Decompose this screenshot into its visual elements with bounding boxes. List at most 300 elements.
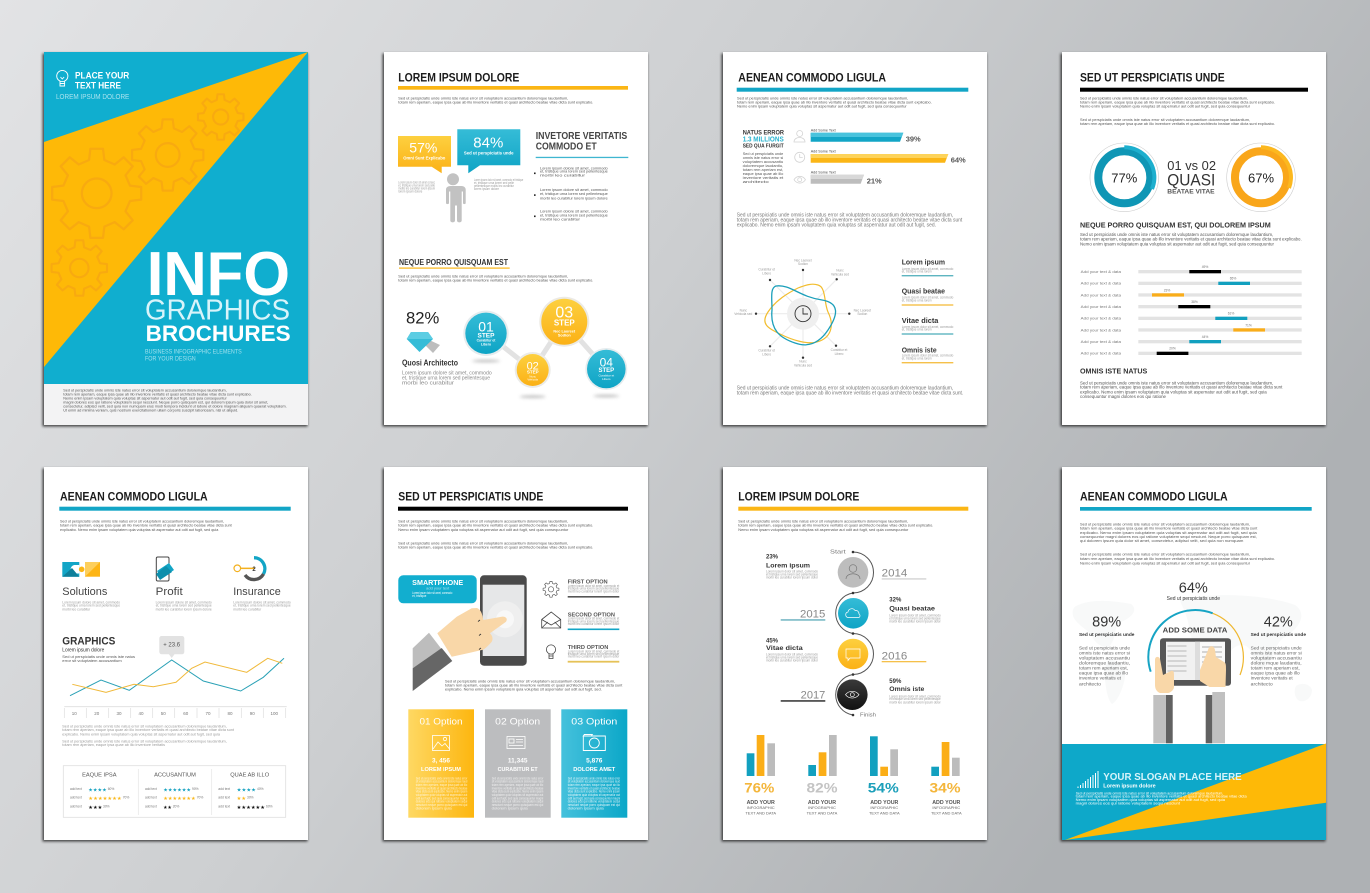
stat block: natus error xyxy=(743,130,784,184)
bar chart: 54%: ADD YOUR xyxy=(870,800,899,806)
stat: 89%: architecto xyxy=(1079,681,1101,686)
range bar chart: Add your text & data xyxy=(1081,282,1122,286)
heading: SED UT PERSPICIATIS UNDE xyxy=(398,492,544,504)
range bar chart: 49% xyxy=(1202,265,1208,269)
illustration: tablet and hands xyxy=(1153,638,1231,743)
cover title xyxy=(145,240,291,346)
legend list: Lorem ipsum dolor sit amet, commodo xyxy=(902,296,954,300)
graph notes: totam rem aperiam, eaque ipsa quae ab illo inventore veritatis xyxy=(62,743,165,747)
range bar chart: 20% xyxy=(1169,347,1176,351)
slogan band xyxy=(1062,744,1326,840)
versus text: QUASI xyxy=(1167,170,1215,189)
line chart: 100 xyxy=(271,711,279,716)
card: 03 option: Sed ut perspiciatis unde omnis iste natus error xyxy=(568,776,621,780)
callout: 57%: Omni Sunt Explicabo xyxy=(403,155,446,160)
step: 32%: 32% xyxy=(889,598,902,604)
section text: Sed ut perspiciatis unde omnis iste natus error sit voluptatem accusantium doloremque laudantium, xyxy=(398,274,568,279)
card: 03 option: sit voluptatem accusantium doloremque laud xyxy=(568,780,620,784)
icon: key and ring: 2 xyxy=(252,567,256,573)
cover title: GRAPHICS xyxy=(145,294,290,326)
year: 2014: 2014 xyxy=(882,568,907,580)
feature: profit: Profit xyxy=(156,586,183,598)
section text: totam rem aperiam, eaque ipsa quae ab illo inventore veritatis et quasi architecto beatae vitae dicta sunt explicabo. xyxy=(1080,236,1302,241)
feature: solutions: Solutions xyxy=(62,586,108,598)
step 03: 03 xyxy=(555,305,573,322)
bar chart: 76%: INFOGRAPHIC xyxy=(747,805,775,810)
stat: 42%: totam rem aperiam est, xyxy=(1251,666,1300,671)
icons: person clock eye xyxy=(794,130,806,183)
heading: LOREM IPSUM DOLORE xyxy=(738,492,860,504)
card: 02 option: CURABITUR ET xyxy=(498,767,538,773)
stat: 64%: 64% xyxy=(1179,581,1208,597)
step: 59%: Lorem ipsum dolor sit amet, commodo xyxy=(889,694,941,698)
card: 01 option: LOREM IPSUM xyxy=(421,767,461,773)
feature: solutions: Lorem ipsum dolore sit amet, commodo xyxy=(62,600,120,604)
stat: 42%: dolore mque laudantiu, xyxy=(1251,661,1302,666)
stat: 82%: 82% xyxy=(406,308,439,327)
section text xyxy=(398,274,593,283)
intro text: explicabo. Nemo enim ipsam voluptatem quia voluptas sit aspernatur aut odit aut fugit, sed quia xyxy=(1080,530,1258,535)
smartphone label: et, tristique xyxy=(412,594,427,598)
stat: 89%: eaque ipsa quae ab illo xyxy=(1079,671,1128,676)
bar chart: horizontal: 39% xyxy=(906,135,921,144)
bar chart: 54% xyxy=(868,736,900,815)
side notes: et, tristique urna lorem sed pelle xyxy=(474,181,514,185)
slogan small text: Sed ut perspiciatis unde omnis iste natus error sit voluptatem accusantium doloremque laudantium, xyxy=(1076,791,1223,795)
intro text: Nemo enim ipsam voluptatem quia voluptas sit aspernatur aut odit aut fugit, sed quia consequuntur xyxy=(398,527,569,532)
panel: page lorem ipsum steps xyxy=(384,52,648,425)
rating table: ★★★★★★★ xyxy=(88,796,122,802)
icon: gear option xyxy=(543,581,559,597)
year: 2015: 2015 xyxy=(800,609,825,621)
stat: 42%: omnis iste natus error si xyxy=(1251,651,1302,656)
bullet list: morbi leo curabitur lorem ipsum dolore xyxy=(540,195,608,200)
step 03: STEP xyxy=(554,319,575,328)
cover footer text: Nemo enim ipsam voluptatem quia voluptas sit aspernatur aut odit aut fugit, sed quia consequuntur xyxy=(63,396,227,401)
radar labels: Nunc xyxy=(740,309,747,313)
card: 01 option xyxy=(408,709,474,818)
rating table: add text xyxy=(218,787,230,791)
option list: Lorem ipsum dolor sit amet, commodo et xyxy=(568,584,619,588)
stat block: natus error: totam rem aperiam est, xyxy=(743,167,783,172)
intro text xyxy=(60,519,233,532)
side notes xyxy=(398,178,523,194)
bar chart: 82%: ADD YOUR xyxy=(808,800,836,806)
rating table: 70% xyxy=(197,796,203,800)
subheading xyxy=(536,130,627,153)
donut: 77% xyxy=(1090,143,1159,212)
stat: 89%: inventore veritatis et xyxy=(1079,676,1122,681)
bar chart: 82%: 82% xyxy=(806,780,838,796)
step 03: Sodion xyxy=(558,333,571,337)
intro text: totam rem aperiam, eaque ipsa quae ab illo inventore veritatis et quasi architecto beatae vitae dicta sunt xyxy=(60,523,233,528)
graphics heading: Lorem ipsum dolore xyxy=(62,647,105,653)
section heading: NEQUE PORRO QUISQUAM EST, QUI DOLOREM IPSUM xyxy=(1080,221,1271,230)
range bar chart: 38% xyxy=(1191,300,1198,304)
side notes: Lorem ipsum dolor sit amet consec xyxy=(398,181,435,185)
icon: key and ring xyxy=(234,558,265,580)
intro text xyxy=(737,95,932,108)
section text: Nemo enim ipsam voluptatem quia voluptas sit aspernatur aut odit aut fugit, sed quia consequuntur xyxy=(1080,241,1274,246)
card: 02 option: totam rem aperiam, eaque ipsa quae ab illo xyxy=(492,783,543,787)
rating table: ★★★★ xyxy=(88,788,107,794)
feature: profit: morbi leo curabitur lorem ipsum dolore xyxy=(156,608,212,612)
line chart: 20 xyxy=(94,711,100,716)
range bar chart: 61% xyxy=(1228,312,1234,316)
footer text: Sed ut perspiciatis unde omnis iste natus error sit voluptatem accusantium doloremque laudantium, xyxy=(737,385,953,391)
card: 03 option: dolores eos qui ratione voluptatem sequi xyxy=(568,800,620,804)
option list: SECOND OPTION xyxy=(568,612,615,618)
slogan small text: totam rem aperiam, eaque ipsa quae ab illo inventore veritatis et quasi architecto beatae vitae dicta xyxy=(1076,794,1247,798)
cover tag text xyxy=(56,70,130,101)
rating table: add text xyxy=(70,804,82,808)
legend list: Lorem ipsum dolor sit amet, commodo xyxy=(902,354,954,358)
option list: tristique urna lorem sed pellentesque xyxy=(568,587,620,591)
intro text: Sed ut perspiciatis unde omnis iste natus error sit voluptatem accusantium doloremque laudantium, xyxy=(737,95,908,100)
radar labels: Vehicula sed xyxy=(794,364,812,368)
line chart: 80 xyxy=(227,711,233,716)
option list: morbi leo curabitur lorem ipsum dolor xyxy=(568,622,620,626)
callout: 84%: Sed ut perspiciatis unde xyxy=(464,151,514,156)
step: 23%: 23% xyxy=(766,555,779,561)
step 02: STEP xyxy=(527,370,539,374)
stat: 89%: doloremque laudantiu, xyxy=(1079,661,1130,666)
bar chart: horizontal: Add Some Text xyxy=(811,149,836,153)
intro text: Nemo enim ipsam voluptatem quia voluptas sit aspernatur aut odit aut fugit, sed quia consequuntur xyxy=(1080,560,1251,565)
closing text xyxy=(1080,380,1283,399)
card: 03 option: voluptatem quia voluptas sit aspernatur aut xyxy=(568,793,620,797)
rating table: 60% xyxy=(108,787,114,791)
timeline xyxy=(830,550,876,719)
intro text: Sed ut perspiciatis unde omnis iste natus error sit voluptatem accusantium doloremque laudantium, xyxy=(738,519,908,524)
feature: profit xyxy=(156,586,212,612)
option list: Lorem ipsum dolor sit amet, commodo et xyxy=(568,649,619,653)
step 02: Vehicula xyxy=(527,378,538,382)
callout: +23.6: + 23.6 xyxy=(163,643,181,649)
rating table: ★★★★★★ xyxy=(163,788,192,794)
cover tag text: PLACE YOUR xyxy=(75,70,130,80)
heading rule xyxy=(59,507,291,511)
intro text: totam rem aperiam, eaque ipsa quae ab illo inventore veritatis et quasi architecto beatae vitae dicta sunt explicabo. xyxy=(398,99,593,104)
band yellow wedge xyxy=(1065,744,1326,840)
rating table: ★★ xyxy=(163,805,172,811)
bar chart: 34%: INFOGRAPHIC xyxy=(932,805,960,810)
intro text: totam rem aperiam, eaque ipsa quae ab illo inventore veritatis et quasi architecto beatae vitae dicta sunt xyxy=(1080,526,1258,531)
radar labels: Vehicula sed xyxy=(734,312,753,316)
node: eye xyxy=(837,679,868,710)
card: 03 option: inventore veritatis et quasi architecto beatae xyxy=(568,786,620,790)
step 02: 02 xyxy=(527,360,539,372)
icon: bulb xyxy=(546,645,556,658)
rating table: add text xyxy=(145,804,157,808)
card: 02 option: inventore veritatis et quasi architecto beatae xyxy=(492,786,543,790)
bar chart: horizontal: Add Some Text xyxy=(811,170,836,174)
icon: puzzle xyxy=(62,562,100,577)
paragraph: totam rem aperiam, eaque ipsa quae ab illo inventore veritatis et quasi architecto beatae vitae dicta sunt xyxy=(737,218,963,224)
intro text: Sed ut perspiciatis unde omnis iste natus error sit voluptatem accusantium doloremque laudantium, xyxy=(1080,95,1248,100)
cover tag text: LOREM IPSUM DOLORE xyxy=(56,94,130,101)
bar chart: 54%: INFOGRAPHIC xyxy=(870,805,898,810)
intro text xyxy=(738,519,933,532)
step 01: STEP xyxy=(478,332,495,339)
step: 32%: et tristique urna lorem sed pellentesque xyxy=(889,616,941,620)
intro text xyxy=(398,519,593,549)
card: 01 option: 01 Option xyxy=(420,717,462,728)
legend list: Lorem ipsum xyxy=(902,257,945,266)
radar labels: Nec Laoreet xyxy=(794,259,812,263)
cover footer text xyxy=(63,388,287,413)
legend list: Lorem ipsum dolor sit amet, commodo xyxy=(902,325,954,329)
bullet list: Lorem ipsum dolore sit amet, commodo xyxy=(540,208,608,213)
panel: page bars and radar xyxy=(723,52,987,425)
heading: AENEAN COMMODO LIGULA xyxy=(60,492,208,504)
intro text: Sed ut perspiciatis unde omnis iste natus error sit voluptatem accusantium doloremque laudantium, xyxy=(1080,117,1250,122)
cover tag text: TEXT HERE xyxy=(75,80,121,90)
stat block: natus error: NATUS ERROR xyxy=(743,130,784,137)
step: 45%: et tristique urna lorem sed pellentesque xyxy=(766,655,818,659)
cover footer text: Ut enim ad minima veniam, quis nostrum exercitationem ullam corporis suscipit laboriosam, nisi ut aliquid. xyxy=(63,408,238,413)
smartphone label: SMARTPHONE xyxy=(412,580,464,587)
callout: +23.6 xyxy=(159,636,184,658)
cover footer text: magni dolores eos qui ratione voluptatem sequi nesciunt. Neque porro quisquam est, qui dolorem ipsum quia dolor sit amet, xyxy=(63,400,268,405)
bar chart: 76%: 76% xyxy=(744,780,775,796)
year: 2017 xyxy=(781,690,825,702)
closing text: totam rem aperiam, eaque ipsa quae ab illo inventore veritatis et quasi architecto beatae vitae dicta sunt xyxy=(1080,385,1283,390)
step: 32%: Quasi beatae xyxy=(889,605,935,612)
year: 2016: 2016 xyxy=(882,650,907,662)
radar labels: Curabitur et xyxy=(758,349,775,353)
closing text: explicabo. Nemo enim ipsam voluptatem quia voluptas sit aspernatur aut odit aut fugit, sed quia xyxy=(1080,389,1267,394)
stat: 42%: Sed ut perspiciatis unde xyxy=(1251,646,1302,651)
card: 01 option: dolores eos qui ratione voluptatem sequi xyxy=(416,800,468,804)
panel: cover brochure xyxy=(44,52,308,425)
rating table: add text xyxy=(70,796,82,800)
icon: envelope xyxy=(542,612,561,628)
intro text: Sed ut perspiciatis unde omnis iste natus error sit voluptatem accusantium doloremque laudantium, xyxy=(1080,552,1250,557)
intro text: totam rem aperiam, eaque ipsa quae ab illo inventore veritatis et quasi architecto beatae vitae dicta sunt explicabo. xyxy=(1080,99,1275,104)
rating table: ACCUSANTIUM xyxy=(154,773,196,779)
intro text: consequuntur magni dolores eos qui ratione voluptatem sequi nesciunt. Neque porro quisquam est, xyxy=(1080,534,1257,539)
range bar chart: Add your text & data xyxy=(1081,340,1122,344)
stat block: natus error: Sed ut perspiciatis unde xyxy=(743,151,784,156)
intro text: Sed ut perspiciatis unde omnis iste natus error sit voluptatem accusantium doloremque laudantium, xyxy=(398,95,568,100)
slogan small text: magni dolores eos qui ratione voluptatem sequi nesciunt xyxy=(1076,801,1180,805)
year: 2016 xyxy=(882,650,926,662)
side notes: lorem ipsum dolore xyxy=(398,190,422,194)
panel: page tablet and slogan xyxy=(1062,467,1326,840)
line chart: 70 xyxy=(205,711,211,716)
subheading: INVETORE VERITATIS xyxy=(536,130,627,142)
card: 03 option: DOLORE AMET xyxy=(573,767,615,773)
paragraph xyxy=(737,213,963,229)
stat: 89% xyxy=(1079,615,1135,686)
slogan text xyxy=(1103,772,1242,790)
step: 59%: 59% xyxy=(889,679,902,685)
stat: 89%: totam rem aperiam est, xyxy=(1079,666,1128,671)
section text xyxy=(1080,232,1302,246)
subheading rule xyxy=(536,157,628,158)
icon: clock xyxy=(795,306,811,322)
cover footer text: consectetur, adipisci velit, sed quia non numquam eius modi tempora incidunt ut labore et dolore magnam aliquam quaerat voluptatem. xyxy=(63,404,287,409)
step 03: Nec Laoreet xyxy=(553,329,576,333)
graph notes: Sed ut perspiciatis unde omnis iste natus error sit voluptatem accusantium doloremque laudantium, xyxy=(62,725,227,729)
section text: Sed ut perspiciatis unde omnis iste natus error sit voluptatem accusantium doloremque laudantium, xyxy=(1080,232,1273,237)
step 01: Curabitur et xyxy=(477,339,496,343)
year: 2017: 2017 xyxy=(801,690,825,702)
slogan small text xyxy=(1076,791,1247,805)
bullet list: morbi leo curabitur xyxy=(540,217,581,222)
bar chart: horizontal: 64% xyxy=(951,155,966,164)
bar chart: 34%: TEXT AND DATA xyxy=(931,810,962,815)
stat block: natus error: SED QUA FURGIT xyxy=(743,143,784,149)
card: 03 option: totam rem aperiam, eaque ipsa quae ab illo xyxy=(568,783,620,787)
arc gauge xyxy=(1148,610,1243,675)
intro text: totam rem aperiam, eaque ipsa quae ab illo inventore veritatis et quasi architecto beatae vitae dicta sunt explicabo. xyxy=(738,523,933,528)
cover footer text: Sed ut perspiciatis unde omnis iste natus error sit voluptatem accusantium doloremque laudantium, xyxy=(63,388,227,393)
bar chart: 76% xyxy=(744,735,776,815)
heading: AENEAN COMMODO LIGULA xyxy=(738,73,886,85)
step 02: Nunc xyxy=(529,374,537,378)
stat: 42%: eaque ipsa quae ab illo xyxy=(1251,671,1300,676)
feature: solutions xyxy=(62,586,120,612)
rating table: ★★★★★★ xyxy=(237,805,266,811)
stat: 42% xyxy=(1251,615,1306,686)
step: 23%: et tristique urna lorem sed pellentesque xyxy=(766,573,818,577)
rating table: ★★★ xyxy=(88,805,103,811)
step 04: STEP xyxy=(598,368,614,374)
node: cloud xyxy=(838,598,869,629)
step: 59%: et tristique urna lorem sed pellentesque xyxy=(889,697,941,701)
architect text: Lorem ipsum dolore sit amet, commodo xyxy=(402,370,492,376)
callout: 84% xyxy=(457,129,520,173)
line chart: 90 xyxy=(250,711,255,716)
donut: 77%: 77% xyxy=(1111,170,1138,185)
radar labels: Libero xyxy=(762,272,771,276)
rating table: add text xyxy=(70,787,82,791)
stat: 89%: omnis iste natus error si xyxy=(1079,651,1130,656)
step 01: 01 xyxy=(478,319,494,335)
intro text: totam rem aperiam, eaque ipsa quae ab illo inventore veritatis et quasi architecto beatae vitae dicta sunt explicabo. xyxy=(1080,556,1275,561)
stat: 64%: Sed ut perspiciatis unde xyxy=(1167,596,1220,602)
rating table: EAQUE IPSA xyxy=(82,773,117,779)
icon: diamond xyxy=(407,332,440,353)
option list: THIRD OPTION xyxy=(568,645,608,651)
versus text xyxy=(1167,159,1216,195)
option list: morbi leo curabitur lorem ipsum dolor xyxy=(568,655,620,659)
rating table: 40% xyxy=(257,787,264,791)
card: 02 option: dolorem ipsum quia xyxy=(492,806,528,810)
radar chart xyxy=(734,259,871,368)
step 01: Libero xyxy=(481,343,491,347)
intro text: totam rem aperiam, eaque ipsa quae ab illo inventore veritatis et quasi architecto beatae vitae dicta sunt explicabo. xyxy=(398,523,593,528)
donut: 67%: 67% xyxy=(1248,170,1274,185)
intro text xyxy=(1080,95,1275,126)
panel: page comparison and ranges xyxy=(1062,52,1326,425)
card: 03 option: vitae dicta sunt explicabo. Nemo enim ipsam xyxy=(568,790,620,794)
rating table: add text xyxy=(218,796,230,800)
card: 03 option: 5,876 xyxy=(586,757,603,764)
step: 23%: morbi leo curabitur lorem ipsum dolor xyxy=(766,576,819,580)
card: 01 option: 3, 456 xyxy=(432,757,450,764)
smartphone label: add your text xyxy=(426,586,450,590)
radar dots xyxy=(755,269,850,359)
card: 02 option: nesciunt neque porro quisquam est qui xyxy=(492,803,544,807)
step: 59% xyxy=(889,679,942,704)
stat: 42%: inventore veritatis et xyxy=(1251,676,1293,681)
timeline: Start xyxy=(830,550,846,556)
callout: 84%: 84% xyxy=(473,134,503,151)
option list: morbi leo curabitur lorem ipsum dolor xyxy=(568,589,620,593)
rating table: add text xyxy=(145,787,157,791)
range bar chart: 71% xyxy=(1245,323,1252,327)
card: 03 option: nesciunt neque porro quisquam est qui xyxy=(568,803,620,807)
card: 01 option: sit voluptatem accusantium doloremque laud xyxy=(416,780,467,784)
card: 01 option: nesciunt neque porro quisquam est qui xyxy=(416,803,468,807)
step: 45%: Vitae dicta xyxy=(766,645,803,652)
step 01 xyxy=(463,311,509,356)
legend list: Omnis iste xyxy=(902,345,937,354)
panel: page solutions and graphics xyxy=(44,467,308,840)
card: 02 option: vitae dicta sunt explicabo. Nemo enim ipsam xyxy=(492,790,544,794)
option list: FIRST OPTION xyxy=(568,580,608,586)
intro text: Nemo enim ipsam voluptatem quia voluptas sit aspernatur aut odit aut fugit, sed quia consequuntur xyxy=(738,527,909,532)
line chart: 50 xyxy=(161,711,166,716)
intro text xyxy=(1080,522,1275,565)
legend list: Lorem ipsum dolor sit amet, commodo xyxy=(902,267,954,271)
graph notes xyxy=(62,725,234,747)
step: 45%: 45% xyxy=(766,638,779,644)
step 04: Libero xyxy=(602,377,611,381)
card: 02 option: voluptatem quia voluptas sit aspernatur aut xyxy=(492,793,543,797)
heading: SED UT PERSPICIATIS UNDE xyxy=(1080,73,1225,85)
stat block: natus error: voluptatem accusantiu xyxy=(743,159,783,164)
stat block: natus error: eaque ipsa quae ab illo xyxy=(743,171,784,176)
legend list: et, tristique urna lorem xyxy=(902,270,932,274)
callout: 57% xyxy=(398,136,451,173)
radar labels xyxy=(734,259,871,368)
range bar chart: 44% xyxy=(1202,335,1208,339)
heading: AENEAN COMMODO LIGULA xyxy=(1080,492,1228,504)
radar labels: Vehicula sed xyxy=(831,273,849,277)
step 04: Curabitur et xyxy=(598,374,614,378)
step: 23%: Lorem ipsum xyxy=(766,562,810,569)
slogan text: YOUR SLOGAN PLACE HERE xyxy=(1103,772,1242,783)
bullet list: Lorem ipsum dolore sit amet, commodo xyxy=(540,165,608,170)
option list: tristique urna lorem sed pellentesque xyxy=(568,619,620,623)
bullet list: et, tristique urna lorem sed pellentesque xyxy=(540,191,608,196)
chart: four step circles xyxy=(463,297,627,398)
feature: insurance: Insurance xyxy=(233,586,281,598)
heading rule xyxy=(737,88,968,92)
legend list: et, tristique urna lorem xyxy=(902,299,932,303)
bar chart: horizontal: Add Some Text xyxy=(811,128,836,132)
paragraph: explicabo. Nemo enim ipsam voluptatem quia voluptas sit aspernatur aut odit aut fugit, sed. xyxy=(737,223,936,229)
subheading: COMMODO ET xyxy=(536,141,597,153)
radar labels: Sodion xyxy=(857,312,867,316)
donut: 67% xyxy=(1227,143,1295,212)
card: 03 option: 03 Option xyxy=(571,717,617,728)
graph notes: explicabo. Nemo enim ipsam voluptatem quia voluptas sit aspernatur aut odit aut fugit, sed quia xyxy=(62,732,220,736)
radar labels: Curabitur et xyxy=(758,268,775,272)
section text: totam rem aperiam, eaque ipsa quae ab illo inventore veritatis et quasi architecto beatae vitae dicta sunt explicabo. xyxy=(398,278,593,283)
radar labels: Nunc xyxy=(799,360,807,364)
intro text xyxy=(398,95,593,104)
timeline: Finish xyxy=(860,713,876,719)
closing text: Sed ut perspiciatis unde omnis iste natus error sit voluptatem accusantium doloremque laudantium, xyxy=(1080,380,1273,385)
paragraph: Sed ut perspiciatis unde omnis iste natus error sit voluptatem accusantium doloremque laudantium, xyxy=(445,678,615,683)
range bar chart: Add your text & data xyxy=(1081,305,1122,309)
rating table: add text xyxy=(218,804,230,808)
